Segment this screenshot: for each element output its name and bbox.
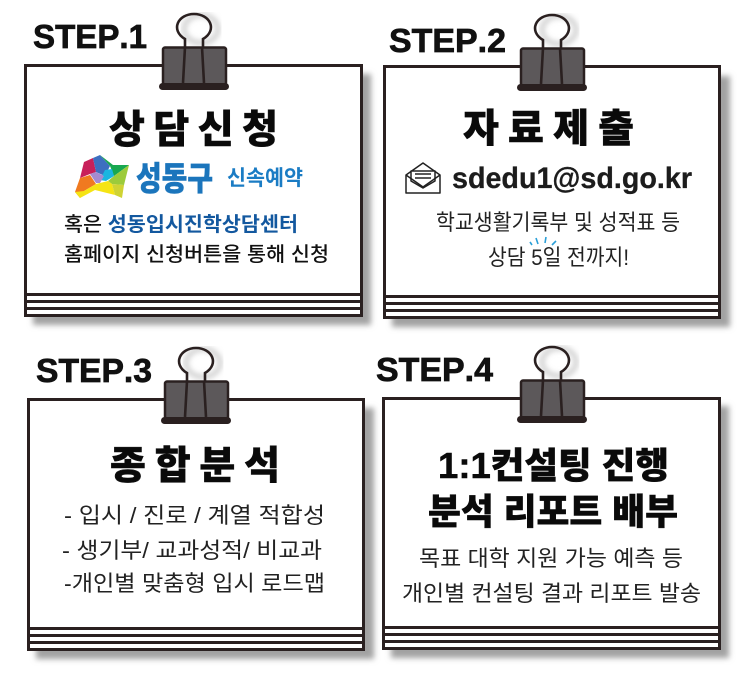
note card xyxy=(25,66,362,316)
heading: 1:1 컨설팅 진행: 1:1컨설팅 진행 xyxy=(438,445,669,486)
heading: STEP.1: STEP.1 xyxy=(33,18,147,55)
text: 입시 진로 계열 적합성: - 입시 / 진로 / 계열 적합성 xyxy=(64,503,325,528)
text: 상담 5일 전까지: 상담 5일 전까지! xyxy=(488,245,629,270)
icon: open envelope xyxy=(406,163,440,193)
panel: step 4 xyxy=(376,347,729,658)
logo wordmark: 성동구: 성동구 xyxy=(136,160,213,197)
card shadow xyxy=(392,76,730,327)
heading: 상담 신청: 상 담 신 청 xyxy=(109,109,278,152)
card shadow xyxy=(391,406,729,658)
text: 학교생활기록부 및 성적표 등: 학교생활기록부 및 성적표 등 xyxy=(436,210,680,235)
note card xyxy=(28,400,364,650)
heading: STEP.3: STEP.3 xyxy=(36,352,152,389)
icon: emphasis burst xyxy=(530,237,556,245)
panel: step 1 xyxy=(25,14,371,325)
text: 개인별 컨설팅 결과 리포트 발송: 개인별 컨설팅 결과 리포트 발송 xyxy=(402,581,701,606)
heading: 분석 리포트 배부: 분석 리포트 배부 xyxy=(428,491,678,532)
heading: 종합 분석: 종 합 분 석 xyxy=(110,445,280,488)
text: email address: sdedu1@sd.go.kr xyxy=(452,162,692,195)
icon: Seongdong-gu logo xyxy=(75,155,129,198)
text: 생기부 교과성적 비교과: - 생기부/ 교과성적/ 비교과 xyxy=(62,538,322,563)
text: 개인별 맞춤형 입시 로드맵: -개인별 맞춤형 입시 로드맵 xyxy=(64,571,325,596)
heading: 자료 제출: 자 료 제 출 xyxy=(463,108,634,151)
text: 목표 대학 지원 가능 예측 등: 목표 대학 지원 가능 예측 등 xyxy=(419,546,683,571)
note card xyxy=(384,66,720,318)
icon: binder clip xyxy=(517,347,587,423)
icon: binder clip xyxy=(159,14,229,90)
card shadow xyxy=(33,74,371,325)
logo label: 신속예약: 신속예약 xyxy=(227,167,303,190)
text: 홈페이지 신청버튼을 통해 신청: 홈페이지 신청버튼을 통해 신청 xyxy=(64,243,329,266)
panel: step 3 xyxy=(28,348,374,659)
text: 혹은 성동입시진학상담센터: 혹은 성동입시진학상담센터 xyxy=(64,213,298,236)
heading: STEP.2: STEP.2 xyxy=(389,22,506,59)
card shadow xyxy=(36,408,374,659)
note card xyxy=(383,398,720,648)
icon: binder clip xyxy=(517,15,587,91)
panel: step 2 xyxy=(384,15,730,327)
heading: STEP.4: STEP.4 xyxy=(376,351,494,388)
icon: binder clip xyxy=(161,348,231,424)
